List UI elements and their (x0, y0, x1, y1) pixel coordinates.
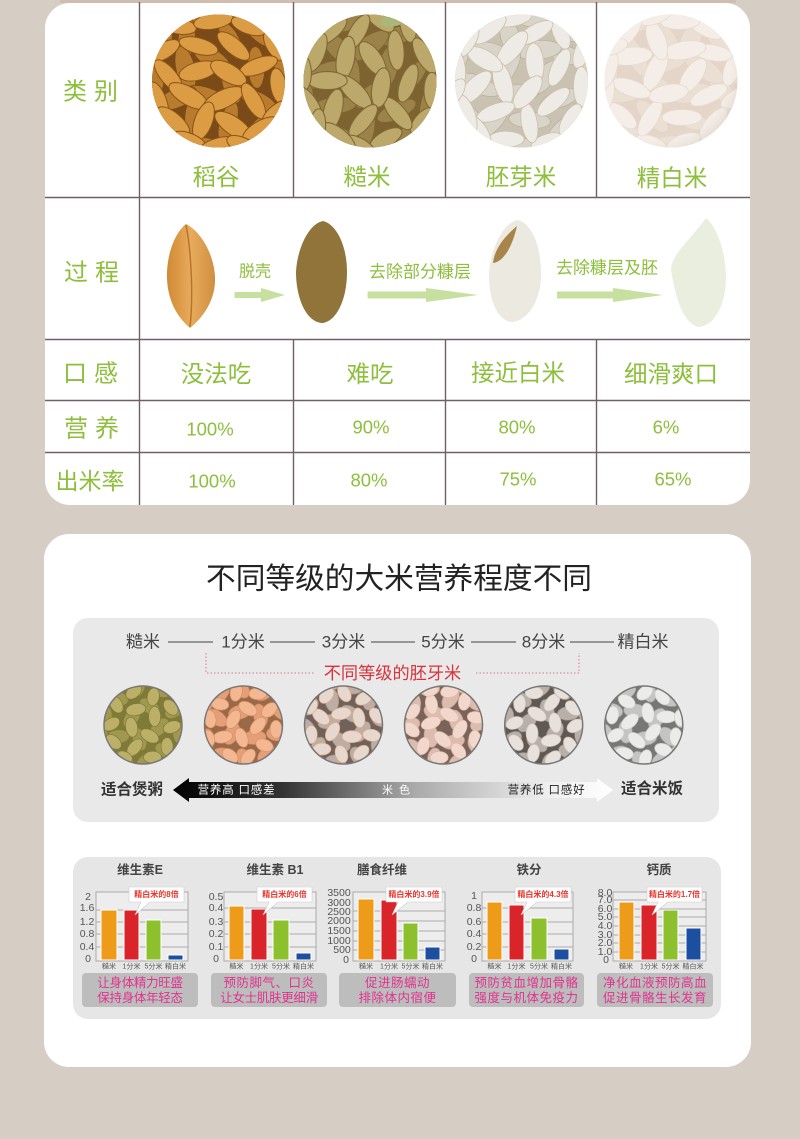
plot area (224, 892, 316, 961)
taste: 难吃: 难吃 (346, 361, 394, 387)
row label: 营养: 营养 (64, 416, 126, 442)
label: suitable for porridge: 适合煲粥 (101, 780, 163, 798)
panel: nutrition by rice grade (44, 534, 751, 1067)
axis values (209, 891, 223, 965)
grain: polished rice (671, 218, 726, 327)
axis values: 2500 (327, 906, 351, 918)
bars (229, 906, 311, 960)
taste: 细滑爽口: 细滑爽口 (624, 361, 718, 387)
callout: 精白米的3.9倍 (388, 889, 440, 899)
callout: 精白米的4.3倍 (517, 889, 569, 899)
category labels: 精白米 (551, 962, 572, 970)
axis values: 3.0 (598, 929, 612, 941)
category labels: 1分米 (123, 962, 140, 970)
photo: paddy rice (152, 14, 285, 148)
connecting lines (168, 641, 614, 643)
axis values: 3000 (327, 897, 351, 909)
axis values: 0.5 (209, 891, 223, 903)
callout: 精白米的8倍 (134, 889, 179, 899)
photo: 8分米 grains (504, 685, 584, 765)
axis values: 0 (603, 954, 609, 966)
benefit box (597, 973, 713, 1007)
axis values (80, 891, 94, 965)
callout (647, 887, 702, 915)
axis values: 6.0 (598, 903, 612, 915)
axis values (598, 887, 612, 966)
axis values: 8.0 (598, 887, 612, 899)
axis values: 1.6 (80, 902, 94, 914)
chart title: 维生素 B1 (247, 862, 304, 877)
axis values: 0.8 (467, 902, 481, 914)
bars (619, 902, 701, 960)
yield: 100%: 100% (188, 470, 236, 492)
axis values: 7.0 (598, 894, 612, 906)
callout (515, 887, 571, 915)
category labels: 糙米 (102, 962, 116, 970)
category labels: 精白米 (293, 962, 314, 970)
chart title: 铁分 (516, 862, 542, 877)
axis values: 3500 (327, 887, 351, 899)
benefit box (339, 973, 456, 1007)
photo: polished white rice (604, 14, 738, 148)
photo: 1分米 grains (204, 685, 284, 765)
category labels: 5分米 (402, 962, 419, 970)
benefit box (82, 973, 198, 1007)
plot area (353, 892, 445, 961)
photo: 3分米 grains (304, 685, 384, 765)
grain: brown rice (296, 221, 347, 323)
arrow text: low nutrition, good taste: 营养低 口感好 (508, 782, 585, 796)
category labels: 精白米 (165, 962, 186, 970)
arrow text: high nutrition, poor taste: 营养高 口感差 (198, 782, 275, 796)
label: 去除部分糠层: 去除部分糠层 (369, 262, 471, 282)
chart: iron (467, 862, 584, 1007)
benefit box: 让身体精力旺盛 (97, 975, 183, 990)
axis values: 0.1 (209, 941, 223, 953)
axis values: 0.4 (209, 902, 223, 914)
axis values: 2 (85, 891, 91, 903)
category labels: 糙米 (230, 962, 244, 970)
category labels: 糙米 (359, 962, 373, 970)
axis values: 5.0 (598, 911, 612, 923)
axis values: 0 (213, 953, 219, 965)
category labels: 1分米 (640, 962, 658, 970)
category labels (359, 962, 443, 970)
category labels (102, 962, 186, 970)
category labels (488, 962, 572, 970)
yield: 80%: 80% (350, 470, 388, 490)
benefit box: 预防贫血增加骨骼 (474, 975, 579, 990)
grain: paddy (167, 224, 215, 328)
axis values: 1 (471, 890, 477, 902)
heading: 不同等级的大米营养程度不同 (206, 562, 592, 596)
chart title: 钙质 (646, 862, 672, 877)
taste: 接近白米: 接近白米 (471, 360, 565, 386)
axis values: 1.2 (80, 916, 94, 928)
nutrition: 6%: 6% (653, 416, 679, 438)
plot area (613, 892, 706, 961)
arrow: rice colour gradient (173, 778, 613, 802)
axis values: 0 (471, 953, 477, 965)
grade: 糙米: 糙米 (126, 632, 160, 652)
row label: 出米率: 出米率 (56, 468, 124, 494)
arrow: remove bran and germ (557, 288, 663, 302)
nutrition: 90%: 90% (352, 416, 390, 438)
axis values (467, 890, 481, 965)
plot area (482, 892, 573, 961)
bars (358, 899, 440, 960)
axis values: 2.0 (598, 937, 612, 949)
benefit box: 促进肠蠕动 (365, 976, 430, 990)
category labels: 糙米 (619, 962, 633, 970)
axis values: 0 (85, 953, 91, 965)
axis values: 500 (333, 944, 351, 956)
axis values (327, 887, 351, 966)
bracket label: 不同等级的胚牙米 (324, 663, 461, 683)
callout: 精白米的6倍 (262, 889, 307, 899)
axis values: 0.8 (80, 928, 94, 940)
row label: 过程: 过程 (64, 260, 126, 286)
category labels (230, 962, 314, 970)
grade: 5分米: 5分米 (421, 632, 465, 652)
category labels: 5分米 (662, 962, 679, 970)
yield: 65%: 65% (654, 468, 692, 490)
benefit box (469, 973, 584, 1007)
taste: 没法吃: 没法吃 (181, 361, 251, 387)
benefit box: 保持身体年轻态 (97, 990, 183, 1005)
chart: vitamin E (80, 862, 198, 1007)
photo: brown rice grains (103, 685, 183, 765)
axis values: 4.0 (598, 920, 612, 932)
label: 脱壳: 脱壳 (239, 262, 271, 280)
category labels: 5分米 (272, 962, 290, 970)
category labels: 糙米 (488, 962, 502, 970)
axis values: 0.4 (467, 928, 481, 940)
table grid lines (45, 2, 750, 505)
arrow: hulling (234, 288, 285, 302)
grade: 1分米: 1分米 (221, 632, 265, 652)
grain: germ rice (489, 220, 541, 322)
axis values: 0.2 (209, 928, 223, 940)
axis values: 0.3 (209, 916, 223, 928)
axis values: 0.2 (467, 941, 481, 953)
axis values: 0 (343, 954, 349, 966)
photo: brown rice (304, 14, 436, 148)
row label: 类别: 类别 (63, 78, 125, 106)
top strip of the page background (60, 0, 736, 3)
label: 去除糠层及胚: 去除糠层及胚 (556, 258, 658, 278)
grade: 8分米: 8分米 (522, 632, 565, 652)
benefit box: 净化血液预防高血 (603, 975, 707, 990)
label: 精白米: 精白米 (637, 165, 707, 191)
category labels: 1分米 (508, 962, 525, 970)
chart: vitamin B1 (209, 862, 327, 1007)
photo: 5分米 grains (404, 685, 484, 765)
panel: rice type comparison table (45, 0, 774, 505)
axis values: 1000 (327, 935, 351, 947)
yield: 75%: 75% (499, 468, 537, 490)
callout: 精白米的1.7倍 (649, 889, 700, 899)
axis values: 1.0 (598, 946, 612, 958)
label: 糙米: 糙米 (344, 164, 390, 190)
nutrition: 100%: 100% (186, 418, 234, 440)
panel: nutrient charts (73, 857, 721, 1019)
axis values: 2000 (327, 915, 351, 927)
benefit box: 排除体内宿便 (358, 990, 437, 1005)
label: 稻谷: 稻谷 (192, 164, 240, 190)
benefit box: 让女士肌肤更细滑 (220, 990, 318, 1005)
grade: 精白米: 精白米 (618, 632, 668, 652)
chart: calcium (597, 862, 713, 1007)
category labels: 5分米 (145, 962, 162, 970)
category labels: 1分米 (380, 962, 398, 970)
grade: 3分米: 3分米 (322, 632, 365, 652)
label: 胚芽米: 胚芽米 (486, 164, 556, 190)
arrow: remove part of the bran (368, 288, 478, 302)
panel: rice grade scale (73, 618, 719, 822)
category labels: 精白米 (682, 962, 704, 970)
category labels: 精白米 (422, 962, 443, 970)
callout (257, 887, 312, 915)
benefit box (211, 973, 327, 1007)
row label: 口感: 口感 (63, 360, 125, 388)
plot area (96, 892, 188, 961)
category labels (619, 962, 704, 970)
category labels: 5分米 (530, 962, 548, 970)
nutrition: 80%: 80% (498, 416, 536, 438)
photo: germ rice (455, 14, 588, 148)
axis values: 1500 (327, 925, 351, 937)
callout (386, 887, 442, 915)
callout (129, 887, 184, 915)
photo: polished rice grains (604, 685, 684, 765)
chart title: 膳食纤维 (357, 862, 407, 877)
benefit box: 促进骨骼生长发育 (603, 990, 707, 1005)
category labels: 1分米 (250, 962, 268, 970)
axis values: 0.6 (467, 916, 481, 928)
arrow text: rice colour: 米色 (382, 782, 416, 796)
axis values: 0.4 (80, 941, 94, 953)
bars (101, 910, 183, 960)
chart title: 维生素E (117, 862, 163, 877)
benefit box: 预防脚气、口炎 (223, 975, 315, 990)
benefit box: 强度与机体免疫力 (474, 990, 579, 1005)
chart: dietary fibre (327, 862, 456, 1007)
dotted bracket (206, 653, 579, 673)
bars (487, 902, 569, 960)
label: suitable for cooked rice: 适合米饭 (621, 778, 683, 798)
